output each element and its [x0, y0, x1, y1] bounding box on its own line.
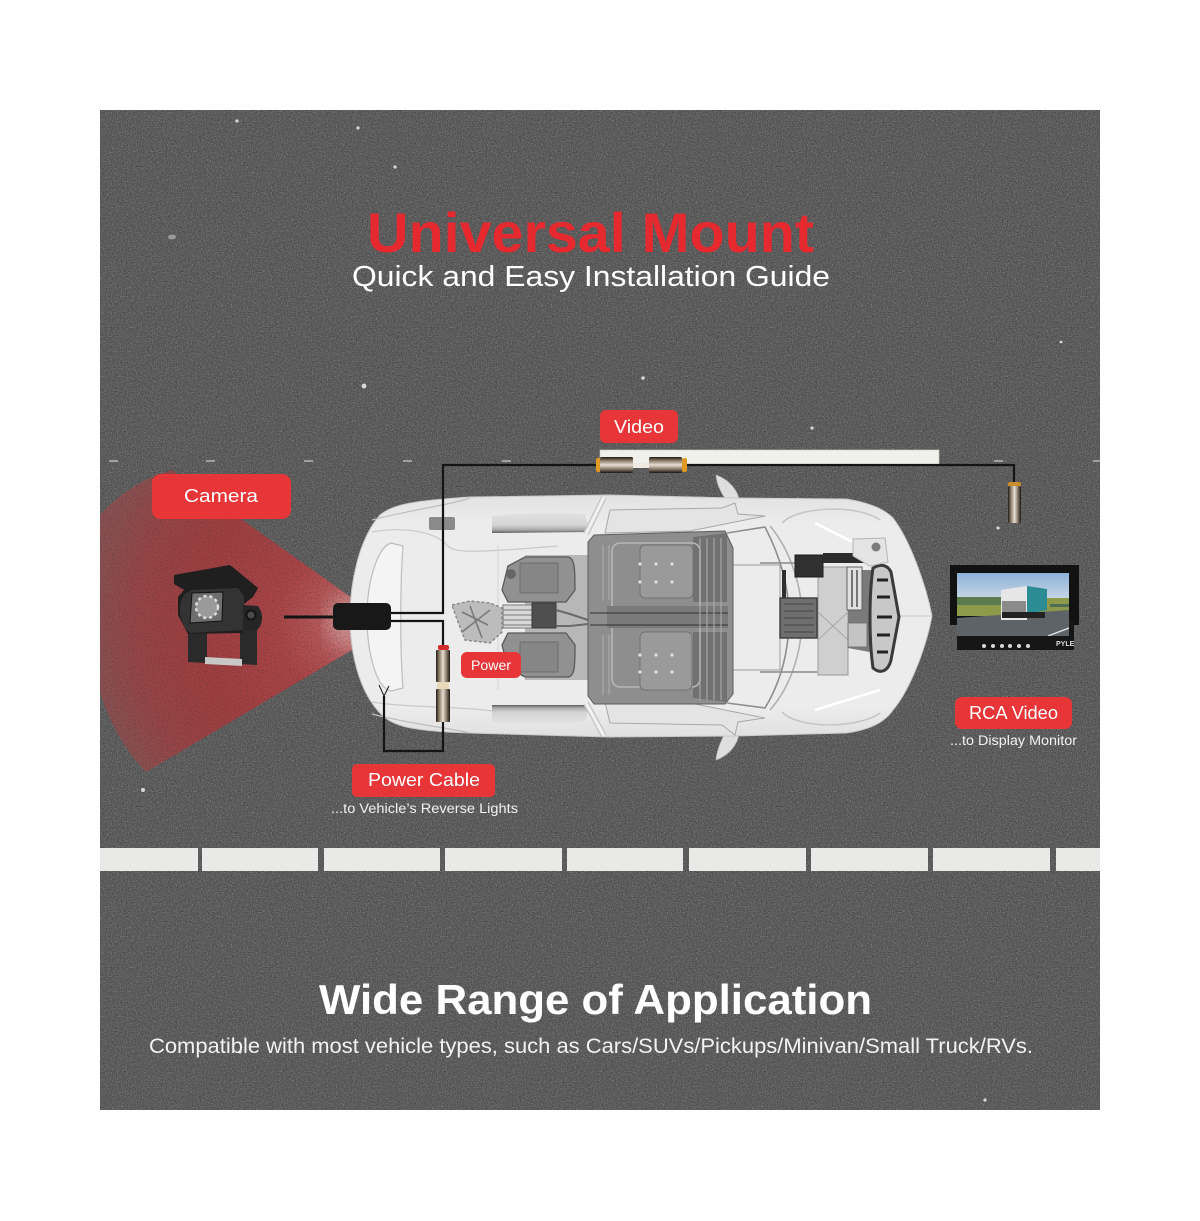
video cable right run — [686, 465, 1014, 486]
wiring — [284, 465, 596, 751]
note: to display monitor: ...to Display Monitor — [950, 733, 1078, 748]
label: Power Cable — [352, 764, 495, 797]
car top-down view — [350, 495, 932, 737]
icon: display monitor — [950, 565, 1079, 650]
note: to reverse lights: ...to Vehicle’s Reverse Lights — [331, 801, 518, 816]
section heading: Wide Range of Application — [319, 976, 872, 1023]
camera field of view cone — [100, 470, 352, 772]
label: Camera — [152, 474, 291, 519]
tail light housing — [429, 517, 455, 530]
label: RCA Video: RCA Video — [969, 703, 1058, 723]
car body — [350, 495, 932, 737]
label: Power Cable: Power Cable — [368, 770, 480, 790]
section description: Compatible with most vehicle types, such as Cars/SUVs/Pickups/Minivan/Small Truck/RVs. — [149, 1035, 1033, 1058]
label: Power: Power — [471, 658, 512, 673]
centre floor console — [733, 565, 780, 670]
label: RCA Video — [955, 697, 1072, 729]
label: Video: Video — [614, 417, 664, 437]
subtitle: Quick and Easy Installation Guide — [352, 261, 830, 293]
rear translucent overlay — [525, 555, 590, 680]
front engine bay — [760, 538, 899, 675]
dashed white lane line — [100, 848, 1100, 871]
pillars and windscreen — [727, 509, 932, 725]
road specks and faint lane ticks — [109, 119, 1100, 1102]
label: Power — [461, 652, 521, 678]
white strip behind video cable — [600, 450, 939, 465]
rear hatch — [367, 498, 558, 733]
power connector — [436, 645, 450, 722]
monitor-side RCA connector — [1008, 482, 1021, 523]
icon: rear-view camera — [174, 565, 262, 666]
label: Video — [600, 410, 678, 443]
side mirrors — [716, 475, 739, 760]
rear axle and motor — [452, 601, 588, 643]
rear tanks — [502, 557, 575, 677]
label: Camera: Camera — [184, 486, 259, 506]
video RCA connector pair — [596, 457, 687, 473]
side windows — [492, 497, 765, 736]
inline control box — [333, 603, 391, 630]
asphalt road background — [100, 110, 1100, 1110]
icon: display monitor: PYLE — [1056, 641, 1075, 648]
title: Universal Mount — [367, 201, 814, 264]
battery pack floor plate — [588, 531, 733, 704]
